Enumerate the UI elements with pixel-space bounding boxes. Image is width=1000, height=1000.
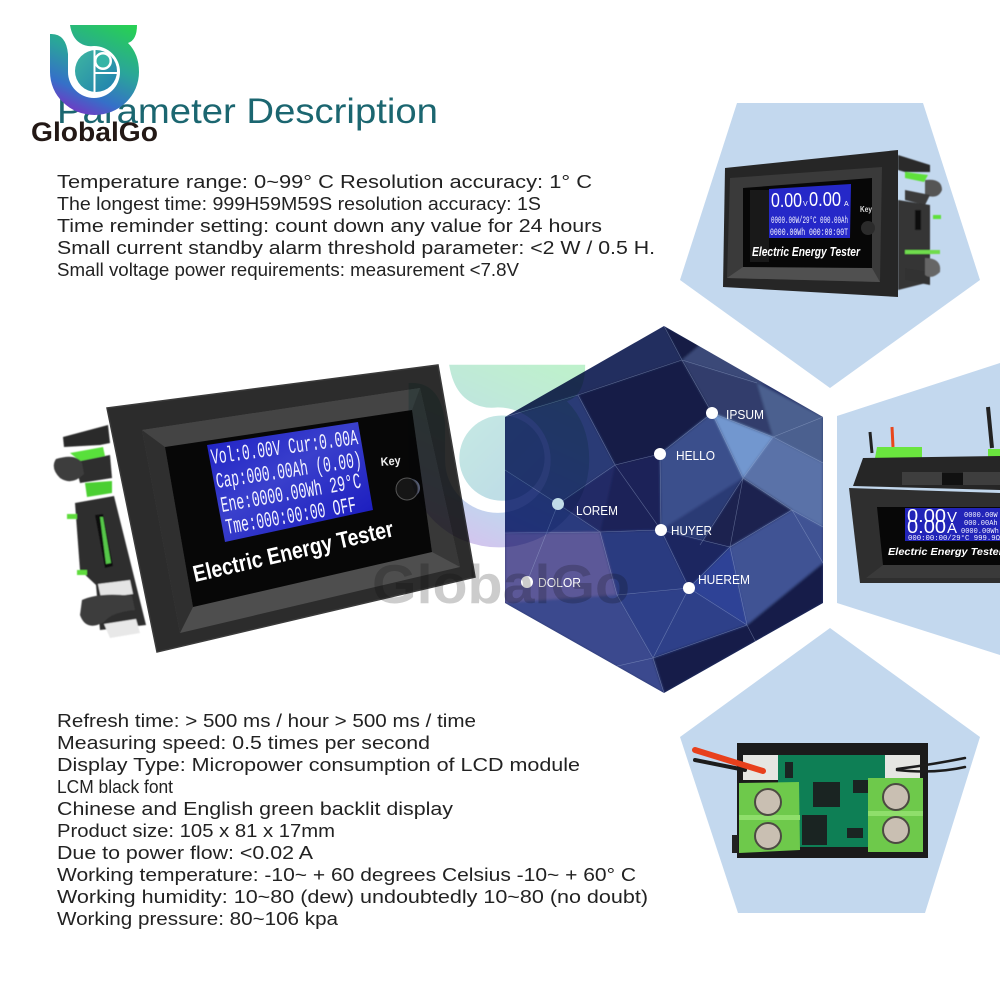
wires <box>870 407 992 453</box>
logo wordmark: GlobalGo <box>31 117 158 147</box>
pcb <box>778 755 885 847</box>
terminal blocks <box>739 778 923 853</box>
text block: lower parameters: Working pressure: 80~106 kpa <box>57 908 339 929</box>
wires <box>695 750 965 771</box>
heading: parameter description: Parameter Description <box>57 92 438 131</box>
text block: lower parameters <box>57 710 648 929</box>
text block: lower parameters: Working temperature: -10~ + 60 degrees Celsius -10~ + 60° C <box>57 864 636 885</box>
lcd screen: 000.00Ah <box>964 520 998 528</box>
connectors <box>743 755 920 780</box>
back clips <box>54 425 146 638</box>
node: HUEREM: HUEREM <box>698 572 750 587</box>
text block: lower parameters: Due to power flow: <0.02 A <box>57 842 314 863</box>
watermark mark <box>409 365 589 547</box>
text block: lower parameters: Product size: 105 x 81 x 17mm <box>57 820 335 841</box>
panel: top pentagon <box>680 103 980 388</box>
node: IPSUM <box>706 407 764 422</box>
lcd screen: 0000.00W <box>964 512 998 520</box>
icon: logo mark <box>50 25 139 115</box>
watermark wordmark: GlobalGo <box>372 553 630 615</box>
face <box>165 410 432 607</box>
lcd screen: 0000.00W/29°C 000.00Ah <box>771 215 848 227</box>
lcd screen <box>905 508 1000 541</box>
lcd screen <box>207 422 373 542</box>
lcd screen: 0000.00Wh <box>961 528 999 536</box>
node: IPSUM: IPSUM <box>726 407 764 422</box>
node: HUYER: HUYER <box>671 523 712 538</box>
product photo: right meter <box>849 407 1000 583</box>
key label: Key <box>860 205 872 214</box>
chips <box>785 762 870 845</box>
lcd screen: Ene:0000.00Wh 29°C <box>219 470 363 519</box>
logo: GlobalGo <box>31 25 158 147</box>
lcd screen: A <box>844 201 849 208</box>
text block: upper parameters <box>57 171 655 280</box>
product label: Electric Energy Tester <box>752 245 861 259</box>
text block: lower parameters: Chinese and English green backlit display <box>57 798 454 819</box>
node: HELLO: HELLO <box>676 448 715 463</box>
product photo: circuit board <box>695 743 965 858</box>
lcd screen: 000:00:00/29°C 999.9Ω <box>908 534 1000 543</box>
product label: Electric Energy Tester <box>888 546 1000 558</box>
product label: Electric Energy Tester <box>190 515 396 587</box>
node: LOREM <box>552 498 618 518</box>
lcd screen: 0.00 <box>907 506 946 526</box>
node: LOREM: LOREM <box>576 503 618 518</box>
node: DOLOR <box>521 575 581 590</box>
text block: upper parameters: Temperature range: 0~99° C Resolution accuracy: 1° C <box>57 171 592 192</box>
text block: lower parameters: Display Type: Micropower consumption of LCD module <box>57 754 580 775</box>
text block: lower parameters: Working humidity: 10~80 (dew) undoubtedly 10~80 (no doubt) <box>57 886 648 907</box>
node: HUEREM <box>683 572 750 594</box>
text block: upper parameters: Small current standby alarm threshold parameter: <2 W / 0.5 H. <box>57 237 655 258</box>
knob <box>861 221 875 235</box>
panel: right pentagon <box>837 363 1000 655</box>
lcd screen: V <box>947 509 957 526</box>
lcd screen: 0000.00Wh 000:00:00T <box>770 227 848 239</box>
text block: lower parameters: Measuring speed: 0.5 times per second <box>57 732 430 753</box>
watermark: GlobalGo logo <box>372 365 630 615</box>
lcd screen: 0.00 <box>771 190 802 212</box>
key label: Key <box>380 453 401 469</box>
lcd screen <box>769 184 851 239</box>
node: HUYER <box>655 523 712 538</box>
text block: upper parameters: Small voltage power requirements: measurement <7.8V <box>57 259 520 280</box>
lcd screen: 0.00 <box>907 517 946 537</box>
panel: central network hexagon <box>500 320 830 700</box>
text block: lower parameters: Refresh time: > 500 ms / hour > 500 ms / time <box>57 710 476 731</box>
text block: lower parameters: LCM black font <box>57 776 174 797</box>
screws <box>755 784 909 849</box>
node: HELLO <box>654 448 715 463</box>
panel: bottom pentagon <box>680 628 980 913</box>
product photo: main meter <box>54 365 475 652</box>
lcd screen: V <box>803 201 808 208</box>
lcd screen: Tme:000:00:00 OFF <box>224 493 358 541</box>
side clips <box>898 155 942 290</box>
lcd screen: Cap:000.00Ah (0.00) <box>214 448 363 495</box>
product photo: top meter <box>723 150 942 297</box>
lcd screen: A <box>947 520 957 537</box>
lcd screen: 0.00 <box>809 189 841 211</box>
text block: upper parameters: The longest time: 999H59M59S resolution accuracy: 1S <box>57 193 541 214</box>
lcd screen: Vol:0.00V Cur:0.00A <box>210 426 360 471</box>
bezel <box>107 365 475 652</box>
text block: upper parameters: Time reminder setting: count down any value for 24 hours <box>57 215 602 236</box>
node: DOLOR: DOLOR <box>538 575 581 590</box>
knob <box>396 478 420 500</box>
